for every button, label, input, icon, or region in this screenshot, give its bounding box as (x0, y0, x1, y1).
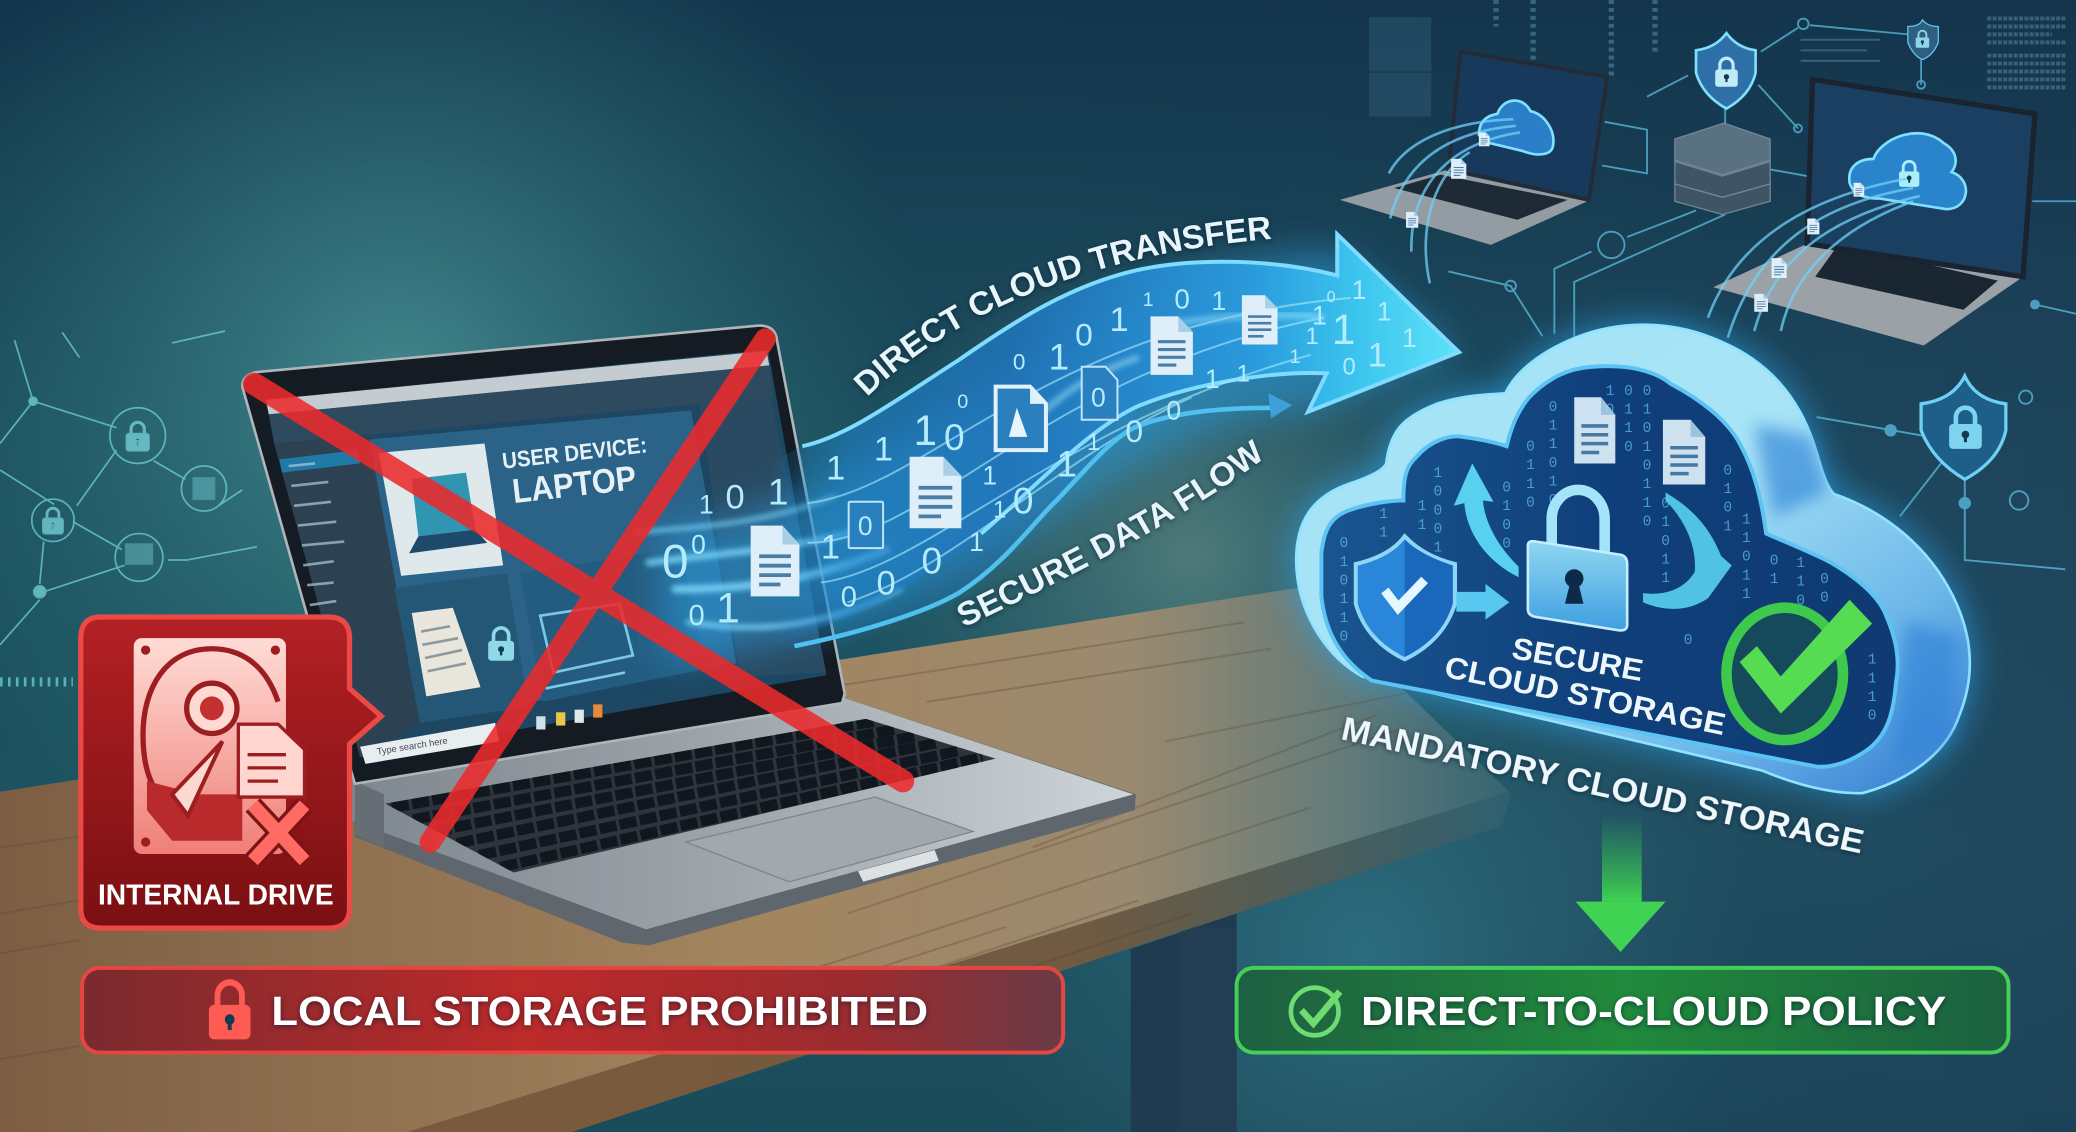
binary digits: 1 (699, 490, 714, 520)
padlock (1528, 490, 1627, 630)
binary digits: 0 (1075, 317, 1093, 353)
binary digits: 0 (1125, 413, 1143, 449)
binary digits: 1 (874, 431, 893, 469)
extrusion shading (1754, 424, 1959, 768)
binary columns: 10001 (1430, 466, 1446, 559)
binary digits: 0 (662, 535, 689, 588)
table (0, 588, 1509, 1132)
red X (254, 339, 903, 842)
binary digits: 0 (1174, 283, 1190, 314)
data flow arrow (642, 217, 1464, 678)
user device label (501, 432, 648, 511)
up curved arrow (1454, 463, 1519, 577)
right shield icon (1921, 376, 2006, 479)
binary digits: 0 (726, 478, 745, 516)
binary columns: 01 (1766, 553, 1782, 591)
ribbon lower fill (768, 406, 1137, 646)
secure cloud (1296, 325, 1970, 793)
binary columns: 01010110 (1639, 384, 1655, 533)
binary columns: 0110 (1523, 440, 1539, 514)
image card (520, 548, 707, 702)
binary digits: 1 (1305, 323, 1319, 350)
binary digits: 1 (1290, 346, 1301, 368)
binary columns: 010110 (1336, 536, 1352, 648)
binary digits: 1 (914, 407, 937, 454)
background laptop right (1708, 79, 2035, 346)
binary digits: 1 (1205, 364, 1220, 394)
table edge (408, 792, 1509, 1132)
binary columns: 00 (1816, 572, 1832, 609)
binary columns: 0110 (1620, 384, 1636, 459)
right panel (699, 397, 826, 677)
cloud glow (1296, 325, 1970, 793)
binary digits: 1 (716, 584, 740, 631)
binary digits: 1 (993, 497, 1006, 524)
right laptop cloud (1849, 133, 1966, 209)
binary digits: 0 (921, 539, 942, 581)
hard drive icon (134, 638, 305, 861)
secure data flow label: SECURE DATA FLOW (956, 438, 1262, 628)
faint dashboard panels top right (1369, 0, 2067, 117)
left laptop data stream (1389, 119, 1520, 283)
binary columns (1336, 384, 1880, 727)
binary digits: 1 (768, 470, 789, 512)
binary digits: 0 (688, 600, 705, 632)
laptop screen (265, 350, 826, 764)
binary digits: 1 (1377, 296, 1392, 326)
binary columns: 011010 (1545, 400, 1561, 512)
binary digits: 0 (1327, 289, 1336, 306)
binary digits: 0 (841, 581, 857, 613)
binary digits: 1 (1368, 337, 1387, 375)
direct cloud transfer label: DIRECT CLOUD TRANSFER (852, 217, 1272, 397)
shield check (1356, 536, 1455, 659)
internal drive label: INTERNAL DRIVE (98, 879, 334, 911)
local storage banner (82, 968, 1063, 1053)
right laptop data stream (1708, 179, 1920, 338)
cloud front panel (1321, 366, 1898, 767)
cloud documents (1574, 397, 1705, 484)
binary columns: 11011 (1738, 512, 1754, 606)
top shield icon (1696, 33, 1756, 109)
binary digits: 1 (1109, 301, 1129, 339)
banner text: DIRECT-TO-CLOUD POLICY (1361, 988, 1946, 1034)
right background: circuit lines (1448, 19, 2076, 569)
arrow to lock (1456, 584, 1509, 620)
server stack (1675, 123, 1770, 214)
binary digits: 1 (1332, 306, 1355, 353)
keyboard (385, 719, 996, 873)
lower thin arrow (794, 393, 1292, 646)
down curved arrow (1643, 493, 1732, 609)
ribbon glow (662, 252, 1459, 662)
binary digits: 1 (1049, 335, 1069, 377)
laptop base (352, 698, 1136, 945)
binary columns: 1110 (1864, 653, 1880, 727)
binary columns: 110 (1793, 556, 1809, 612)
binary digits: 1 (1352, 275, 1367, 305)
binary digits: 0 (1166, 396, 1181, 426)
binary digits: 0 (944, 416, 965, 458)
binary digits: 1 (1057, 443, 1077, 485)
binary digits: 0 (691, 529, 706, 559)
binary digits: 1 (1402, 323, 1417, 353)
binary digits: 1 (1237, 360, 1250, 387)
ribbon outline (802, 234, 1459, 534)
cloud extrusion (1296, 325, 1970, 793)
documents: 0 (858, 511, 873, 541)
binary columns: 0100 (1499, 481, 1515, 555)
background laptop left (1340, 52, 1607, 283)
user device label: LAPTOP (510, 459, 638, 511)
binary digits: 0 (957, 391, 968, 413)
streaks over the screen (636, 496, 900, 627)
binary digits: 0 (1343, 354, 1356, 381)
binary columns: 01011 (1658, 496, 1674, 590)
binary digits: 1 (1087, 429, 1100, 456)
left laptop cloud (1479, 101, 1553, 154)
internal drive panel (81, 617, 381, 928)
binary digits: 0 (1013, 349, 1025, 374)
green down arrow (1576, 814, 1666, 952)
binary columns: 11 (1376, 507, 1392, 544)
device card (379, 444, 503, 576)
secure cloud storage label: CLOUD STORAGE (1442, 650, 1729, 742)
taskbar: Type search here (376, 736, 448, 757)
ribbon arrow (768, 234, 1459, 646)
main laptop (242, 326, 1136, 945)
binary digits: 0 (1013, 480, 1033, 522)
document card (395, 573, 528, 723)
taskbar (360, 704, 602, 764)
binary digits: 1 (826, 449, 845, 487)
binary columns: 1011 (1602, 384, 1618, 459)
sidebar (274, 434, 421, 757)
mandatory cloud storage label: MANDATORY CLOUD STORAGE (1338, 710, 1867, 861)
secure cloud storage label: SECURE (1509, 631, 1646, 688)
binary columns: 0101 (1720, 463, 1736, 538)
main content pane (369, 410, 736, 723)
documents (751, 295, 1278, 596)
binary digits: 1 (969, 527, 984, 557)
table leg (1131, 914, 1237, 1132)
banner check icon (1291, 988, 1340, 1035)
table top surface (0, 588, 1509, 1132)
binary columns: 11 (1414, 499, 1430, 536)
left security network (0, 331, 257, 682)
green check badge (1726, 600, 1872, 740)
laptop lid (242, 326, 845, 784)
binary digits: 1 (982, 461, 997, 491)
binary digits: 1 (1312, 300, 1327, 330)
binary columns: 0 (1680, 633, 1696, 652)
streaks (808, 298, 1350, 602)
binary digits: 0 (876, 564, 896, 602)
banner lock icon (209, 982, 251, 1039)
binary digits: 1 (821, 529, 840, 567)
banner text: LOCAL STORAGE PROHIBITED (271, 988, 928, 1034)
documents: 0 (1091, 382, 1106, 412)
direct to cloud banner (1237, 968, 2008, 1053)
binary digits: 1 (1211, 286, 1226, 316)
trackpad (686, 797, 973, 882)
binary digits (662, 275, 1417, 632)
user device label: USER DEVICE: (501, 432, 648, 474)
binary digits: 1 (1143, 289, 1154, 311)
small shield icon top right (1908, 20, 1938, 60)
